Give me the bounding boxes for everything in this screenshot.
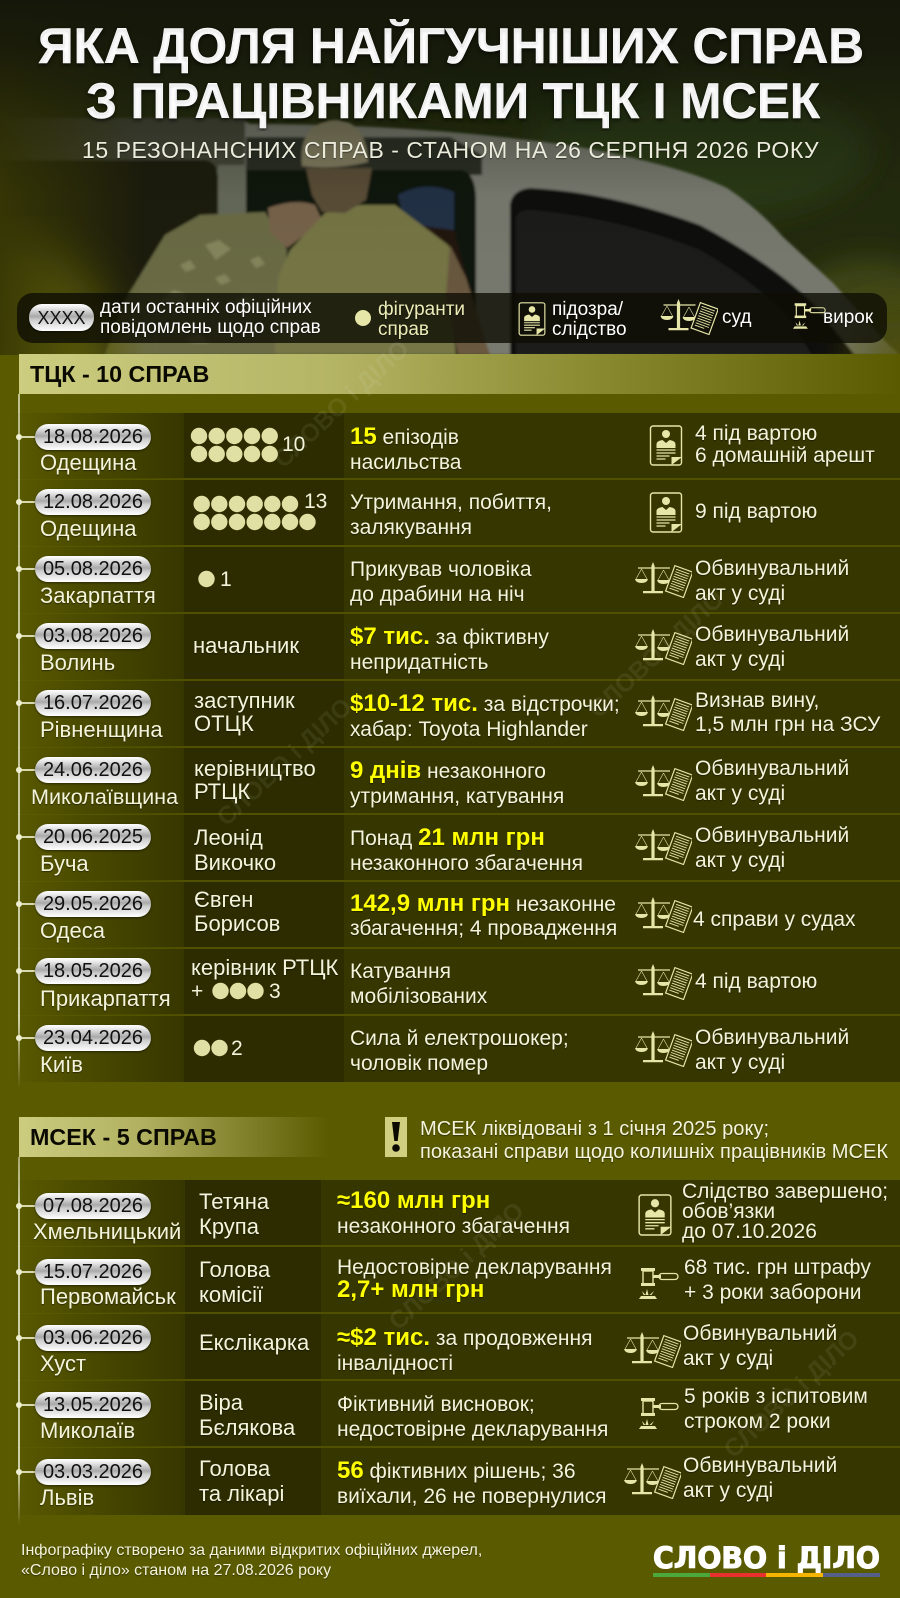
status icon — [638, 1194, 672, 1236]
legend: verdict icon — [793, 303, 826, 329]
status: обов’язки — [682, 1200, 775, 1223]
row МСЕК 5 — [0, 1448, 900, 1515]
date and region: Київ — [40, 1052, 83, 1077]
status icon — [650, 425, 682, 466]
legend bar — [17, 293, 887, 343]
date and region — [33, 1193, 183, 1246]
row ТЦК 9 — [0, 949, 900, 1015]
status: акт у суді — [695, 582, 785, 605]
status: Обвинувальний — [695, 557, 849, 580]
description: ≈$2 тис. за продовження — [337, 1324, 592, 1351]
figurant dots: 10 — [282, 433, 305, 456]
status — [695, 823, 849, 873]
figurant name: Віра — [199, 1390, 243, 1415]
description: Утримання, побиття, — [350, 491, 552, 514]
status — [682, 1182, 888, 1242]
description — [350, 690, 620, 742]
figurant name: Бєлякова — [199, 1415, 295, 1440]
description: хабар: Toyota Highlander — [350, 718, 588, 741]
status — [695, 557, 849, 606]
row ТЦК 1 — [0, 413, 900, 479]
date and region — [35, 1459, 185, 1512]
description — [350, 757, 564, 808]
watermark: СЛОВО і ДІЛО — [268, 335, 415, 474]
status — [684, 1255, 871, 1305]
description: утримання, катування — [350, 785, 564, 808]
section header: МСЕК: МСЕК - 5 СПРАВ — [30, 1124, 217, 1150]
date and region — [34, 824, 152, 877]
section header: ТЦК: ТЦК - 10 СПРАВ — [30, 361, 209, 387]
status icon — [635, 964, 692, 1000]
date and region: Рівненщина — [40, 717, 163, 742]
row МСЕК 3 — [0, 1314, 900, 1380]
МСЕК note: МСЕК ліквідовані з 1 січня 2025 року; — [420, 1118, 769, 1140]
description: ≈160 млн грн — [337, 1187, 490, 1214]
figurant role: Екслікарка — [199, 1330, 309, 1355]
date and region: Хмельницький — [33, 1219, 181, 1244]
date and region — [34, 489, 152, 542]
date and region — [34, 690, 163, 742]
status icon — [635, 765, 692, 801]
figurant dots — [190, 428, 305, 462]
figurant name: Євген — [194, 887, 253, 912]
date and region: Миколаївщина — [31, 784, 178, 809]
description — [337, 1458, 606, 1509]
status icon — [639, 1398, 679, 1429]
figurant dots: 13 — [304, 490, 327, 513]
date and region: 23.04.2026 — [43, 1027, 143, 1049]
legend: suspicion text: слідство — [552, 319, 627, 340]
figurant role and dots: + — [191, 980, 203, 1003]
figurant role: заступник — [194, 688, 295, 713]
figurant role: РТЦК — [194, 779, 250, 804]
date and region — [35, 1392, 185, 1445]
date and region: Волинь — [40, 650, 115, 675]
legend: court text: суд — [722, 307, 751, 328]
date and region: Одещина — [40, 516, 136, 541]
row ТЦК 4 — [0, 614, 900, 680]
footer source note: «Слово і діло» станом на 27.08.2026 року — [21, 1562, 331, 1578]
description — [350, 623, 549, 674]
date and region — [35, 958, 185, 1013]
description: $7 тис. за фіктивну — [350, 623, 549, 650]
status: Обвинувальний — [695, 623, 849, 646]
legend: date pill — [29, 304, 94, 331]
status: 68 тис. грн штрафу — [684, 1256, 871, 1279]
watermark: СЛОВО і ДІЛО — [211, 693, 358, 832]
date and region: 18.08.2026 — [43, 426, 143, 448]
figurant role: комісії — [199, 1282, 263, 1307]
row ТЦК 6 — [0, 748, 900, 814]
МСЕК note — [420, 1118, 888, 1164]
date and region — [34, 556, 156, 609]
figurant name — [199, 1390, 295, 1440]
figurant role: начальник — [193, 633, 299, 658]
figurant name: Борисов — [194, 911, 280, 936]
status icon — [635, 829, 692, 865]
date and region — [35, 1259, 185, 1312]
legend: suspicion icon — [518, 302, 546, 336]
date and region: 18.05.2026 — [43, 960, 143, 982]
description — [350, 491, 552, 540]
status: строком 2 роки — [684, 1410, 831, 1433]
legend: verdict text: вирок — [823, 307, 873, 328]
date and region: 03.06.2026 — [43, 1327, 143, 1349]
section header: ТЦК — [19, 354, 900, 394]
status icon — [624, 1332, 681, 1368]
footer source note — [21, 1541, 482, 1580]
date and region — [35, 1325, 185, 1378]
figurant role and dots: 3 — [269, 980, 281, 1003]
row МСЕК 2 — [0, 1247, 900, 1313]
row ТЦК 3 — [0, 547, 900, 613]
description: Катування — [350, 960, 451, 983]
description — [350, 1026, 569, 1076]
figurant name: Крупа — [199, 1214, 259, 1239]
row ТЦК 8 — [0, 882, 900, 948]
date and region — [34, 424, 152, 476]
figurant role — [199, 1257, 270, 1307]
description: Понад 21 млн грн — [350, 824, 545, 851]
figurant name: Тетяна — [199, 1189, 269, 1214]
description — [350, 558, 532, 606]
status — [695, 422, 875, 468]
description — [337, 1392, 608, 1442]
description: 56 фіктивних рішень; 36 — [337, 1457, 576, 1484]
figurant role — [199, 1456, 284, 1506]
status: Визнав вину, — [695, 689, 819, 712]
status — [684, 1384, 868, 1434]
description: $10-12 тис. за відстрочки; — [350, 690, 620, 717]
date and region: 16.07.2026 — [43, 692, 143, 714]
figurant role: керівництво — [194, 756, 316, 781]
legend: figurants text: справ — [378, 319, 429, 340]
date and region — [31, 757, 178, 810]
figurant name: Леонід — [194, 825, 263, 850]
status icon — [624, 1463, 681, 1499]
figurant dots — [193, 1037, 253, 1061]
row ТЦК 2 — [0, 480, 900, 546]
figurant role and dots: керівник РТЦК — [191, 955, 338, 980]
figurant role: Голова — [199, 1257, 270, 1282]
status: 4 під вартою — [695, 970, 817, 993]
description — [337, 1325, 592, 1376]
description: 9 днів незаконного — [350, 757, 546, 784]
description: до драбини на ніч — [350, 583, 525, 606]
legend: figurants text: фігуранти — [378, 299, 465, 320]
date and region: 03.08.2026 — [43, 625, 143, 647]
status: 1,5 млн грн на ЗСУ — [695, 713, 880, 736]
status: 5 років з іспитовим — [684, 1385, 868, 1408]
date and region — [34, 623, 152, 675]
description: недостовірне декларування — [337, 1418, 608, 1441]
date and region: 12.08.2026 — [43, 491, 143, 513]
date and region: 07.08.2026 — [43, 1195, 143, 1217]
date and region: Первомайськ — [40, 1284, 176, 1309]
status: до 07.10.2026 — [682, 1220, 817, 1243]
legend: dates text: повідомлень щодо справ — [100, 317, 321, 338]
description: Прикував чоловіка — [350, 558, 532, 581]
status — [683, 1321, 837, 1371]
date and region: 13.05.2026 — [43, 1394, 143, 1416]
warning icon — [385, 1117, 407, 1157]
date and region: 03.03.2026 — [43, 1461, 143, 1483]
legend: figurants text — [378, 299, 465, 340]
description: збагачення; 4 провадження — [350, 917, 617, 940]
description — [350, 959, 487, 1009]
description: інвалідності — [337, 1352, 453, 1375]
status: Обвинувальний — [695, 824, 849, 847]
watermark: СЛОВО і ДІЛО — [718, 1325, 865, 1464]
status icon — [635, 897, 692, 933]
figurant role: ОТЦК — [194, 711, 254, 736]
date and region: 24.06.2026 — [43, 759, 143, 781]
date and region: Хуст — [40, 1351, 86, 1376]
status: акт у суді — [695, 782, 785, 805]
description: 2,7+ млн грн — [337, 1276, 484, 1303]
status: 6 домашній арешт — [695, 444, 875, 467]
status — [695, 623, 849, 672]
background photo: soldiers at a car — [0, 0, 900, 355]
status: Обвинувальний — [683, 1454, 837, 1477]
figurant dots — [198, 569, 232, 591]
description: 142,9 млн грн незаконне — [350, 890, 616, 917]
section header: МСЕК — [19, 1117, 329, 1157]
figurant name — [199, 1189, 269, 1239]
row ТЦК 5 — [0, 681, 900, 747]
timeline line ТЦК — [18, 394, 20, 1089]
date and region: 29.05.2026 — [43, 893, 143, 915]
status: Обвинувальний — [683, 1322, 837, 1345]
row ТЦК 10 — [0, 1016, 900, 1082]
status: акт у суді — [695, 849, 785, 872]
date and region: 05.08.2026 — [43, 558, 143, 580]
description — [350, 892, 617, 941]
status icon — [635, 629, 692, 665]
МСЕК note: показані справи щодо колишніх працівників МСЕК — [420, 1141, 888, 1163]
status: Обвинувальний — [695, 757, 849, 780]
status — [695, 689, 880, 736]
status — [683, 1453, 837, 1503]
figurant role — [194, 756, 316, 804]
date and region: Львів — [40, 1485, 94, 1510]
date and region: 20.06.2025 — [43, 826, 143, 848]
figurant role — [194, 688, 295, 736]
description — [337, 1257, 612, 1302]
status icon — [635, 1031, 692, 1067]
row МСЕК 4 — [0, 1381, 900, 1447]
status icon — [639, 1268, 679, 1299]
watermark: СЛОВО і ДІЛО — [583, 585, 730, 724]
figurant name: Викочко — [194, 850, 276, 875]
date and region — [35, 1025, 185, 1080]
subtitle: 15 РЕЗОНАНСНИХ СПРАВ - СТАНОМ НА 26 СЕРПНЯ 2026 РОКУ — [82, 137, 819, 163]
description: непридатність — [350, 651, 488, 674]
description: Недостовірне декларування — [337, 1256, 612, 1279]
figurant dots: 2 — [231, 1037, 243, 1060]
description — [337, 1188, 570, 1239]
legend: date pill: XXXX — [37, 308, 86, 328]
legend: suspicion text — [552, 299, 627, 340]
description — [350, 423, 462, 474]
legend: court icon — [660, 299, 718, 335]
status: акт у суді — [695, 1051, 785, 1074]
date and region: Прикарпаття — [40, 986, 171, 1011]
figurant name — [194, 825, 276, 875]
footer source note: Інфографіку створено за даними відкритих офіційних джерел, — [21, 1542, 482, 1559]
figurant role: та лікарі — [199, 1481, 284, 1506]
status: 9 під вартою — [695, 500, 817, 523]
description: чоловік помер — [350, 1052, 488, 1075]
date and region: Одеса — [40, 918, 105, 943]
status: 4 справи у судах — [693, 908, 856, 931]
figurant role: Голова — [199, 1456, 270, 1481]
timeline line МСЕК — [18, 1157, 20, 1525]
status: Слідство завершено; — [682, 1180, 888, 1203]
date and region — [35, 891, 185, 946]
status icon — [635, 695, 692, 731]
legend: figurant dot — [355, 310, 371, 326]
legend: dates text — [100, 297, 321, 338]
status: Обвинувальний — [695, 1026, 849, 1049]
legend: suspicion text: підозра/ — [552, 299, 623, 320]
status: акт у суді — [683, 1479, 773, 1502]
description — [350, 824, 583, 875]
description: незаконного збагачення — [337, 1215, 570, 1238]
date and region: Буча — [40, 851, 89, 876]
description: Сила й електрошокер; — [350, 1027, 569, 1050]
status icon — [635, 562, 692, 598]
description: насильства — [350, 451, 461, 474]
figurant dots — [194, 490, 327, 530]
status: 4 під вартою — [695, 422, 817, 445]
date and region: Одещина — [40, 450, 136, 475]
status icon — [650, 492, 682, 533]
row ТЦК 7 — [0, 815, 900, 881]
legend: dates text: дати останніх офіційних — [100, 297, 312, 318]
description: залякування — [350, 516, 472, 539]
figurant name — [194, 888, 280, 936]
description: виїхали, 26 не повернулися — [337, 1485, 606, 1508]
watermark: СЛОВО і ДІЛО — [383, 1197, 530, 1336]
title: ЯКА ДОЛЯ НАЙГУЧНІШИХ СПРАВ — [38, 19, 864, 74]
date and region: Миколаїв — [40, 1418, 135, 1443]
row МСЕК 1 — [0, 1180, 900, 1246]
status: + 3 роки заборони — [684, 1281, 861, 1304]
status: акт у суді — [695, 648, 785, 671]
description: незаконного збагачення — [350, 852, 583, 875]
title: З ПРАЦІВНИКАМИ ТЦК І МСЕК — [86, 73, 820, 129]
status — [695, 1025, 849, 1075]
status — [695, 757, 849, 806]
description: 15 епізодів — [350, 423, 459, 450]
date and region: Закарпаття — [40, 583, 156, 608]
status: акт у суді — [683, 1347, 773, 1370]
title — [38, 19, 864, 131]
description: Фіктивний висновок; — [337, 1393, 535, 1416]
date and region: 15.07.2026 — [43, 1261, 143, 1283]
description: мобілізованих — [350, 985, 487, 1008]
figurant role and dots — [191, 955, 341, 1009]
